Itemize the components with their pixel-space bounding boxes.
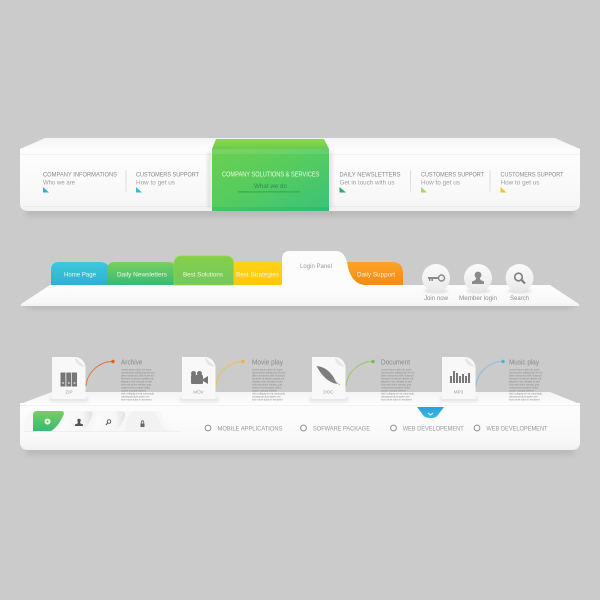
tab: home page: Home Page xyxy=(64,272,96,278)
button: search: Search xyxy=(510,295,529,302)
panel: tabbed shelf xyxy=(21,251,579,309)
nav item: daily newsletters xyxy=(340,172,401,192)
description: corper suscipit lobortis xyxy=(252,390,278,392)
file icon: MOV xyxy=(193,390,205,394)
file icon: ZIP xyxy=(65,390,73,394)
description: consequat duis autem vel xyxy=(121,396,150,398)
panel: top navigation bar xyxy=(20,138,580,216)
connector xyxy=(216,361,243,386)
button: join now: Join now xyxy=(424,295,448,302)
tab: daily newsletters xyxy=(107,262,177,285)
tab: active green add xyxy=(33,411,64,431)
nav item: customers support 2 xyxy=(421,172,484,192)
description: aliquam erat volutpat ut wisi xyxy=(381,380,412,384)
nav item: customers support 2: How to get us xyxy=(421,180,460,186)
nav item: daily newsletters: DAILY NEWSLETTERS xyxy=(340,172,401,178)
description: corper suscipit lobortis xyxy=(121,390,147,392)
connector xyxy=(476,361,503,386)
description: eum iriure dolor in hendrerit xyxy=(121,398,152,402)
nav item: daily newsletters: Get in touch with us xyxy=(340,180,394,186)
nav item: customers support 1 xyxy=(136,172,199,192)
description: Lorem ipsum dolor sit amet, xyxy=(121,368,152,372)
nav item: active green company solutions: COMPANY SOLUTIONS & SERVICES xyxy=(222,172,320,178)
description xyxy=(381,360,415,402)
nav item: company informations xyxy=(43,172,117,192)
menu item: mobile applications: MOBILE APPLICATIONS xyxy=(218,426,283,432)
description: diam nonummy nibh euismod xyxy=(381,374,414,378)
nav item: customers support 2: CUSTOMERS SUPPORT xyxy=(421,172,484,178)
description: eum iriure dolor in hendrerit xyxy=(252,398,283,402)
tab: login panel: Login Panel xyxy=(300,263,333,270)
tab group: icon tabs xyxy=(24,411,180,432)
description: eum iriure dolor in hendrerit xyxy=(509,398,540,402)
description: Document xyxy=(381,360,410,366)
description xyxy=(121,360,155,402)
description: consectetur adipiscing elit sed xyxy=(509,372,543,374)
tab: best strategies xyxy=(232,262,284,285)
menu item: web development 2: WEB DEVELOPEMENT xyxy=(486,426,548,432)
description: Music play xyxy=(509,360,539,366)
tab: login panel xyxy=(282,251,364,285)
tab: daily newsletters: Daily Newsletters xyxy=(117,272,168,278)
tab: best solutions: Best Solutions xyxy=(183,272,224,278)
description: Movie play xyxy=(252,360,283,366)
file item: music play mp3 xyxy=(440,357,543,402)
description: enim ad minim veniam quis xyxy=(121,384,152,386)
nav item: customers support 3: How to get us xyxy=(500,180,540,186)
connector xyxy=(86,361,113,386)
description: nisl ut aliquip ex ea commodo xyxy=(509,392,543,396)
tab: home page xyxy=(51,262,108,285)
menu item: software package: SOFWARE PACKAGE xyxy=(313,426,370,432)
description: diam nonummy nibh euismod xyxy=(121,374,154,378)
nav item: active green company solutions: What we do xyxy=(254,183,287,190)
description: aliquam erat volutpat ut wisi xyxy=(509,380,540,384)
description: nostrud exerci tation ullam xyxy=(252,386,281,390)
file item: document doc xyxy=(310,357,415,402)
description: nisl ut aliquip ex ea commodo xyxy=(381,392,415,396)
nav item: customers support 1: CUSTOMERS SUPPORT xyxy=(136,172,199,178)
description: nostrud exerci tation ullam xyxy=(509,386,538,390)
tab: lock xyxy=(125,411,172,431)
panel: bottom file bar xyxy=(20,392,580,455)
menu item: web development 1 xyxy=(391,425,464,432)
button: member login: Member login xyxy=(459,295,497,302)
description: nostrud exerci tation ullam xyxy=(381,386,410,390)
description: eum iriure dolor in hendrerit xyxy=(381,398,412,402)
file icon: DOC xyxy=(323,390,334,394)
nav item: company informations: COMPANY INFORMATIONS xyxy=(43,172,117,178)
menu item: web development 2 xyxy=(474,425,548,432)
connector xyxy=(346,361,373,386)
menu item: software package xyxy=(301,425,370,432)
description: aliquam erat volutpat ut wisi xyxy=(252,380,283,384)
file icon: MP3 xyxy=(454,390,464,394)
button: join now xyxy=(422,264,450,302)
description xyxy=(509,360,543,402)
description: consectetur adipiscing elit sed xyxy=(381,372,415,374)
description: corper suscipit lobortis xyxy=(381,390,407,392)
description: tincidunt ut laoreet dolore ma xyxy=(121,378,154,380)
description: tincidunt ut laoreet dolore ma xyxy=(509,378,542,380)
description: consequat duis autem vel xyxy=(252,396,281,398)
icon: magnifier xyxy=(515,273,525,284)
description: Lorem ipsum dolor sit amet, xyxy=(509,368,540,372)
description: tincidunt ut laoreet dolore ma xyxy=(381,378,414,380)
icon: key xyxy=(428,275,444,281)
description: consequat duis autem vel xyxy=(509,396,538,398)
description: enim ad minim veniam quis xyxy=(381,384,412,386)
button: search xyxy=(506,264,534,302)
description: Lorem ipsum dolor sit amet, xyxy=(252,368,283,372)
dropdown toggle xyxy=(417,407,444,418)
nav item: customers support 3: CUSTOMERS SUPPORT xyxy=(500,172,564,178)
nav item: customers support 1: How to get us xyxy=(136,180,175,186)
nav item: active green company solutions xyxy=(212,139,329,211)
description: diam nonummy nibh euismod xyxy=(509,374,542,378)
file item: archive zip xyxy=(50,357,155,402)
description: nisl ut aliquip ex ea commodo xyxy=(252,392,286,396)
description: diam nonummy nibh euismod xyxy=(252,374,285,378)
description: Archive xyxy=(121,360,143,366)
description: corper suscipit lobortis xyxy=(509,390,535,392)
description: tincidunt ut laoreet dolore ma xyxy=(252,378,285,380)
description: consectetur adipiscing elit sed xyxy=(121,372,155,374)
description: consectetur adipiscing elit sed xyxy=(252,372,286,374)
description: consequat duis autem vel xyxy=(381,396,410,398)
description: nisl ut aliquip ex ea commodo xyxy=(121,392,155,396)
tab: daily support xyxy=(345,262,403,285)
description: aliquam erat volutpat ut wisi xyxy=(121,380,152,384)
description: enim ad minim veniam quis xyxy=(252,384,283,386)
description xyxy=(252,360,286,402)
button: member login xyxy=(459,264,497,302)
tab: best solutions xyxy=(174,256,234,285)
description: enim ad minim veniam quis xyxy=(509,384,540,386)
menu item: web development 1: WEB DEVELOPEMENT xyxy=(403,426,464,432)
tab: daily support: Daily Support xyxy=(357,272,395,278)
tab: search xyxy=(92,411,125,431)
nav item: company informations: Who we are xyxy=(43,180,75,186)
tab: best strategies: Best Strategies xyxy=(236,272,280,278)
description: Lorem ipsum dolor sit amet, xyxy=(381,368,412,372)
description: nostrud exerci tation ullam xyxy=(121,386,150,390)
file item: movie play mov xyxy=(180,357,286,402)
icon: person xyxy=(472,272,484,284)
nav item: customers support 3 xyxy=(500,172,564,192)
tab: user xyxy=(60,411,92,431)
